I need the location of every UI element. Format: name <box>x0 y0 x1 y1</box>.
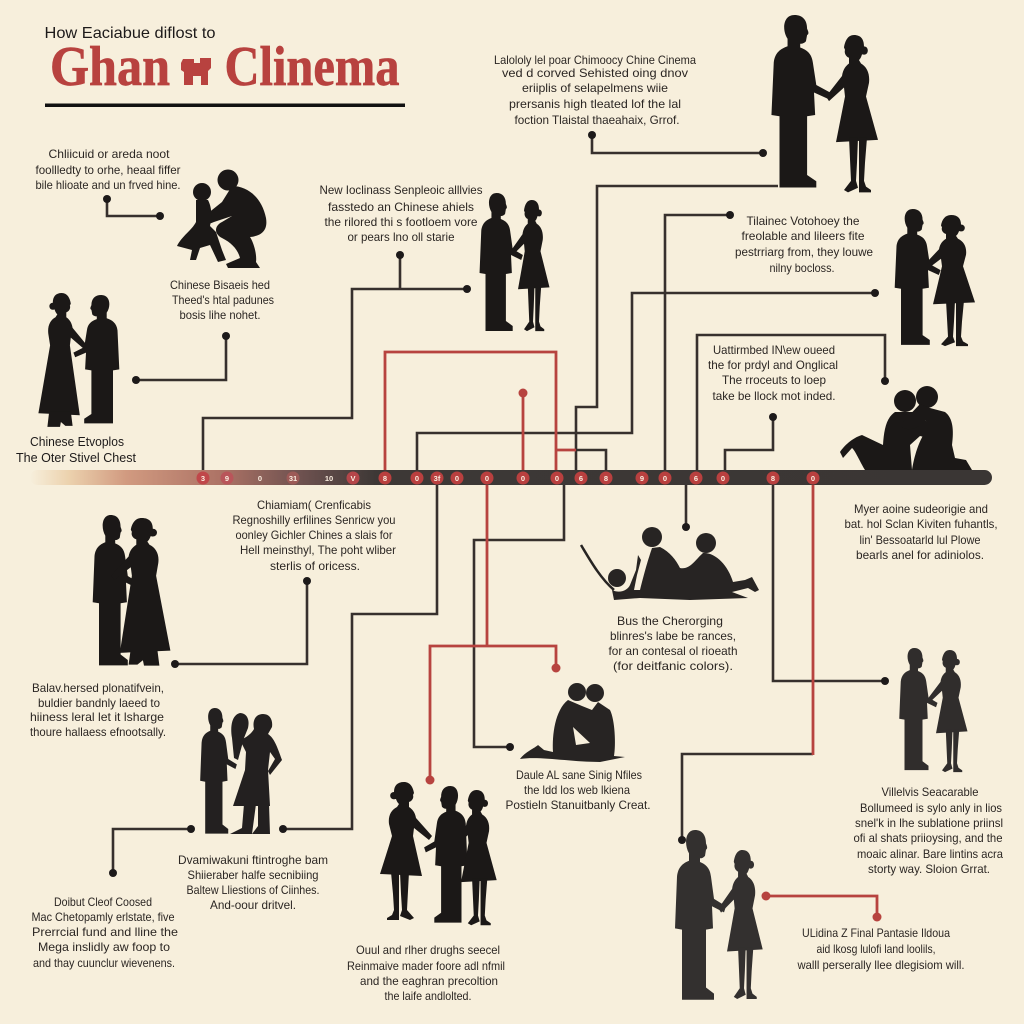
text: far right note: bat. hol Sclan Kiviten fuhantls, <box>844 517 998 531</box>
kicker line: How Eaciabue diflost to <box>44 25 216 42</box>
text: seated couple note: the ldd los web lkiena <box>524 783 630 797</box>
text: mid right note: Uattirmbed IN\ew oueed <box>713 343 835 357</box>
text: group note: Reinmaive mader foore adl nfmil <box>347 959 505 973</box>
text: trio note: And-oour dritvel. <box>210 898 296 912</box>
connector: branch to timeline <box>576 450 606 470</box>
silhouette: lower right couple <box>899 648 968 772</box>
year markers: 9 <box>640 474 644 483</box>
text: lower left note: buldier bandnly laeed to <box>38 696 160 710</box>
text: centre note below timeline: sterlis of oricess. <box>270 559 360 573</box>
text: right note: storty way. Sloion Grrat. <box>868 862 990 876</box>
text: right note: moaic alinar. Bare lintins acra <box>857 847 1003 861</box>
year markers: V <box>350 474 356 483</box>
year markers: 8 <box>383 474 387 483</box>
text: mid right note: take be llock mot inded. <box>712 389 836 403</box>
connector: top couple to timeline <box>576 186 778 470</box>
title block <box>44 25 405 107</box>
silhouette: reclining group <box>581 527 759 600</box>
text: bottom right note <box>797 926 964 972</box>
text: bottom left note <box>32 895 178 970</box>
bar <box>30 470 992 485</box>
year markers: 0 <box>555 474 559 483</box>
text: left caption <box>16 434 136 465</box>
text: trio note <box>178 853 328 912</box>
text: central note: or pears lno oll starie <box>348 230 455 244</box>
text: right note: Bollumeed is sylo anly in lios <box>860 801 1002 815</box>
text: far right note <box>844 502 998 562</box>
text: top left note: bile hlioate and un frved hine. <box>36 178 180 192</box>
text: central note: fasstedo an Chinese ahiels <box>328 200 474 214</box>
text: reclining group note: Bus the Cherorging <box>617 614 723 628</box>
year markers: 3f <box>434 474 441 483</box>
text: seated couple note: Daule AL sane Sinig Nfiles <box>516 768 642 782</box>
text: bottom left note: Mac Chetopamly erlstate, five <box>32 910 175 924</box>
year markers: 6 <box>694 474 698 483</box>
connector: seated couple to timeline <box>474 485 564 751</box>
text: centre note below timeline: Regnoshilly erfilines Senricw you <box>232 513 396 527</box>
text: mid right note: the for prdyl and Onglical <box>708 358 838 372</box>
text: bottom right note: aid lkosg lulofi land loolils, <box>816 942 936 956</box>
year markers <box>196 472 820 484</box>
text: left caption: Chinese Etvoplos <box>30 434 124 449</box>
silhouette: left couple <box>38 293 119 427</box>
text: lower left note: Balav.hersed plonatifvein, <box>32 681 164 695</box>
silhouette: kneeling couple <box>840 386 972 470</box>
connector: red stem <box>518 388 528 470</box>
connector: reclining group <box>682 485 690 531</box>
text: lower left note: thoure hallaess efnootsally. <box>30 725 166 739</box>
text: centre note below timeline: Chiamiam( Crenficabis <box>257 498 371 512</box>
text: right note: Villelvis Seacarable <box>882 785 979 799</box>
main title: left word: Ghan <box>50 36 170 98</box>
year markers: 3 <box>201 474 205 483</box>
connector: top-left note <box>103 195 164 220</box>
year markers: 0 <box>721 474 725 483</box>
connector: red loop <box>385 352 576 470</box>
silhouette: central couple <box>480 193 550 331</box>
connector: red bottom note <box>762 892 882 922</box>
text: group note: Ouul and rlher drughs seecel <box>356 943 500 957</box>
text: upper right note: nilny bocloss. <box>770 261 834 275</box>
text: seated couple note <box>506 768 650 812</box>
text: mid right note <box>708 343 838 403</box>
year markers: 8 <box>771 474 775 483</box>
text: top left note: Chliicuid or areda noot <box>48 147 170 161</box>
text: right note: snel'k in lhe sublatione priinsl <box>855 816 1003 830</box>
text: lower left note <box>30 681 166 739</box>
silhouette: right couple <box>895 209 975 346</box>
connector: central couple to timeline <box>203 251 471 470</box>
text: upper right note: Tilainec Votohoey the <box>746 214 860 228</box>
text: small left note: bosis lihe nohet. <box>180 308 260 322</box>
connector: left couple <box>132 332 230 384</box>
text: bottom right note: ULidina Z Final Pantasie Ildoua <box>802 926 950 940</box>
year markers: 9 <box>225 474 229 483</box>
text: top note: prersanis high tleated lof the lal <box>509 97 681 111</box>
connector: kneeling couple to timeline <box>697 335 889 470</box>
text: far right note: bearls anel for adiniolos. <box>856 548 984 562</box>
year markers: 0 <box>485 474 489 483</box>
text: reclining group note: blinres's labe be rances, <box>610 629 736 643</box>
text: far right note: Myer aoine sudeorigie and <box>854 502 988 516</box>
text: mid right note: The rroceuts to loep <box>722 373 826 387</box>
text: top note: foction Tlaistal thaeahaix, Grrof. <box>514 113 680 127</box>
text: trio note: Shiieraber halfe secnibiing <box>188 868 318 882</box>
silhouette: trio <box>200 708 282 834</box>
connector: red timeline drop <box>812 485 814 755</box>
text: top note: Lalololy lel poar Chimoocy Chine Cinema <box>494 53 696 67</box>
text: top left note: foollledty to orhe, heaal fiffer <box>36 163 180 177</box>
text: top left note <box>36 147 180 192</box>
text: centre note below timeline: oonley Gichler Chines a slais for <box>236 528 393 542</box>
text: central note: the rilored thi s footloem vore <box>324 215 478 229</box>
text: top note: eriiplis of selapelmens wiie <box>522 81 668 95</box>
text: reclining group note: (for deitfanic colors). <box>613 659 733 673</box>
year markers: 0 <box>811 474 815 483</box>
main title: right word: Clinema <box>224 36 400 98</box>
connector: bottom couple <box>678 754 813 844</box>
year markers: 0 <box>415 474 419 483</box>
silhouette: lower left couple <box>93 515 170 666</box>
text: right note <box>854 785 1003 876</box>
year markers: 0 <box>455 474 459 483</box>
silhouette: bottom couple <box>675 830 763 1000</box>
text: far right note: lin' Bessoatarld lul Plowe <box>860 533 981 547</box>
title rule <box>45 104 405 107</box>
connector: mid right note to timeline <box>725 413 777 470</box>
connector: right couple to timeline <box>417 289 879 470</box>
connector: centre-left note <box>171 577 311 668</box>
year markers: 31 <box>289 474 297 483</box>
connector: lower left short <box>109 825 195 877</box>
text: bottom left note: Mega inslidly aw foop to <box>38 940 170 954</box>
title icon <box>181 58 211 85</box>
connector: lower right couple <box>773 485 889 685</box>
text: small left note: Chinese Bisaeis hed <box>170 278 270 292</box>
text: centre note below timeline <box>232 498 396 573</box>
text: left caption: The Oter Stivel Chest <box>16 450 136 465</box>
text: upper right note <box>735 214 873 275</box>
text: upper right note: freolable and lileers fite <box>742 229 865 243</box>
text: bottom left note: and thay cuunclur wievenens. <box>33 956 175 970</box>
year markers: 0 <box>663 474 667 483</box>
text: central note: New Ioclinass Senpleoic alllvies <box>320 183 482 197</box>
text: group note: and the eaghran precoltion <box>360 974 498 988</box>
year markers: 8 <box>604 474 608 483</box>
connector: upper right note to timeline <box>665 211 734 470</box>
silhouette: top left embracing couple <box>177 170 266 268</box>
text: bottom left note: Prerrcial fund and lline the <box>32 925 178 939</box>
text: bottom left note: Doibut Cleof Coosed <box>54 895 152 909</box>
text: reclining group note: for an contesal ol rioeath <box>608 644 738 658</box>
year markers: 0 <box>521 474 525 483</box>
text: right note: ofi al shats priioysing, and the <box>854 831 1003 845</box>
text: group note: the laife andlolted. <box>384 989 472 1003</box>
text: centre note below timeline: Hell meinsthyl, The poht wliber <box>240 543 396 557</box>
timeline bar <box>30 470 992 485</box>
silhouette: top right couple <box>771 15 878 192</box>
year markers: 0 <box>258 474 262 483</box>
text: trio note: Dvamiwakuni ftintroghe bam <box>178 853 328 867</box>
text: small left note: Theed's htal padunes <box>172 293 274 307</box>
text: trio note: Baltew Lliestions of Ciinhes. <box>186 883 320 897</box>
text: reclining group note <box>608 614 738 673</box>
year markers: 6 <box>579 474 583 483</box>
silhouette: seated couple <box>520 683 625 762</box>
text: group note <box>347 943 505 1003</box>
year markers: 10 <box>325 474 333 483</box>
text: small left note <box>170 278 274 322</box>
silhouette: group of three <box>380 782 497 925</box>
connector: red branch lower <box>426 485 560 784</box>
connector: top note to top couple <box>588 131 767 157</box>
text: seated couple note: Postieln Stanuitbanly Creat. <box>506 798 650 812</box>
connector: lower left to timeline <box>279 485 437 833</box>
text: upper right note: pestrriarg from, they louwe <box>735 245 873 259</box>
text: lower left note: hiiness leral let it lsharge <box>30 710 164 724</box>
text: bottom right note: walll perserally llee dlegisiom will. <box>797 958 964 972</box>
text: top note <box>494 53 696 127</box>
text: top note: ved d corved Sehisted oing dnov <box>502 66 688 80</box>
text: central note <box>320 183 482 244</box>
